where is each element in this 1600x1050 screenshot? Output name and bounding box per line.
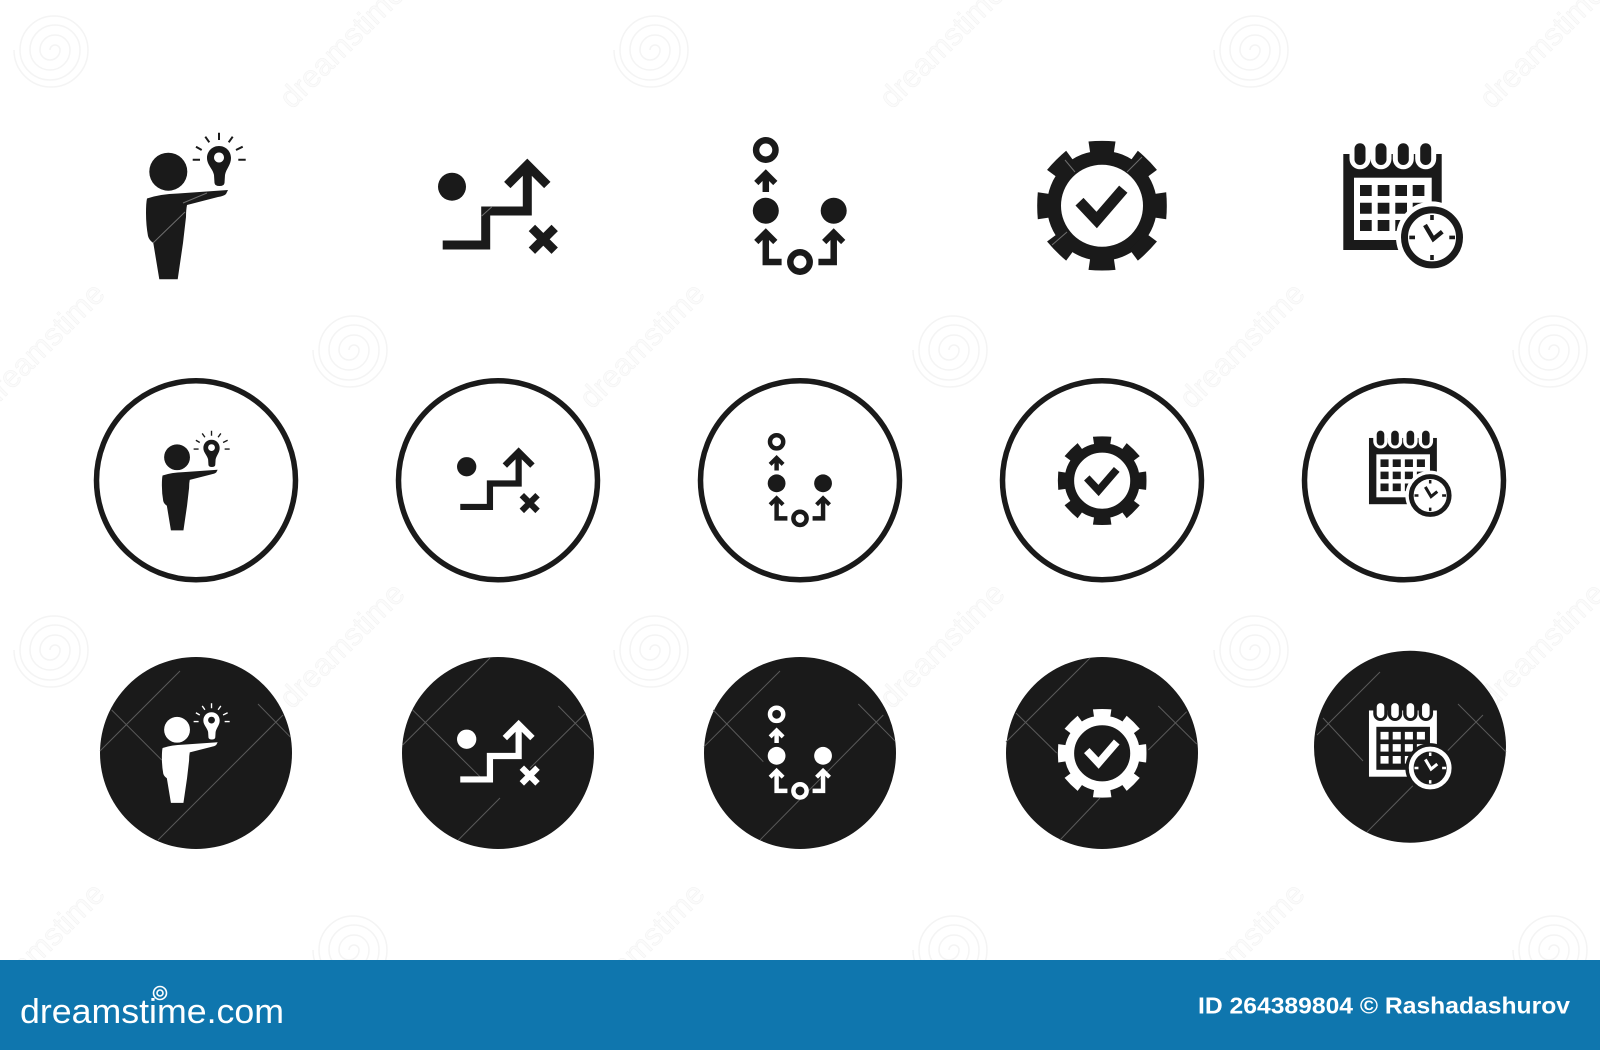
icon: gear with check, outlined circle — [1002, 381, 1202, 580]
icon: person presenting idea, solid circle — [100, 657, 292, 849]
watermark pattern: dreamstime — [572, 276, 711, 415]
logo spiral — [154, 986, 166, 1000]
footer banner — [0, 960, 1600, 1050]
icon: calendar with clock, plain — [1343, 143, 1468, 273]
watermark pattern: dreamstime — [272, 576, 411, 715]
icon: flow diagram, outlined circle — [700, 381, 900, 580]
logo wordmark: dreamstime.com — [20, 993, 284, 1031]
icon: flow diagram, plain — [753, 140, 847, 272]
icon: calendar with clock, solid circle — [1314, 651, 1506, 843]
icon: stairs strategy, plain — [438, 165, 555, 251]
image id and credit: ID 264389804 © Rashadashurov — [1198, 992, 1570, 1018]
icon: person presenting idea, outlined circle — [96, 381, 296, 580]
icon: gear with check, solid circle — [1006, 657, 1198, 849]
icon: flow diagram, solid circle — [704, 657, 896, 849]
icon: calendar with clock, outlined circle — [1304, 381, 1504, 580]
watermark pattern: dreamstime — [572, 876, 711, 1015]
icon: person presenting idea, plain — [146, 133, 246, 279]
icon: stairs strategy, outlined circle — [398, 381, 598, 580]
watermark pattern: dreamstime — [1172, 876, 1311, 1015]
icon: gear with check, plain — [1037, 141, 1167, 270]
watermark pattern: dreamstime — [1172, 276, 1311, 415]
icon: stairs strategy, solid circle — [402, 657, 594, 849]
watermark pattern: dreamstime — [872, 576, 1011, 715]
